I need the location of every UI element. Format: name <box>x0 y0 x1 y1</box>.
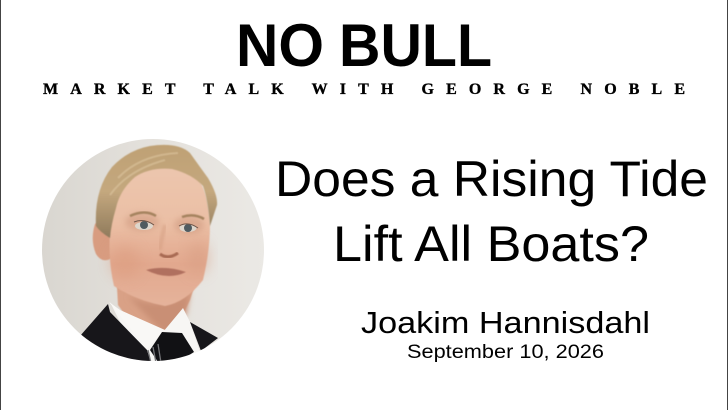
portrait face <box>110 167 210 306</box>
title: NO <box>236 12 324 79</box>
subtitle: MARKET TALK WITH GEORGE NOBLE <box>43 81 685 98</box>
portrait background <box>40 137 266 363</box>
collar left flap <box>109 302 165 349</box>
title <box>236 12 492 79</box>
portrait neck <box>116 288 194 330</box>
title: BULL <box>339 12 492 79</box>
neck shadow <box>134 294 193 330</box>
headline line 2: Lift All Boats? <box>333 216 649 272</box>
portrait hair <box>96 145 217 238</box>
portrait collar <box>110 302 200 362</box>
date: September 10, 2026 <box>407 342 604 363</box>
cheek warmth <box>111 246 139 278</box>
headline line 1: Does a Rising Tide <box>275 151 708 207</box>
portrait <box>40 137 266 363</box>
portrait jacket <box>81 304 218 361</box>
portrait tie <box>148 332 194 363</box>
portrait nose <box>160 225 178 257</box>
author name: Joakim Hannisdahl <box>361 305 650 340</box>
portrait ear <box>93 222 112 260</box>
hair streaks <box>110 153 178 195</box>
portrait mouth <box>146 268 186 276</box>
portrait eyes <box>125 212 204 234</box>
